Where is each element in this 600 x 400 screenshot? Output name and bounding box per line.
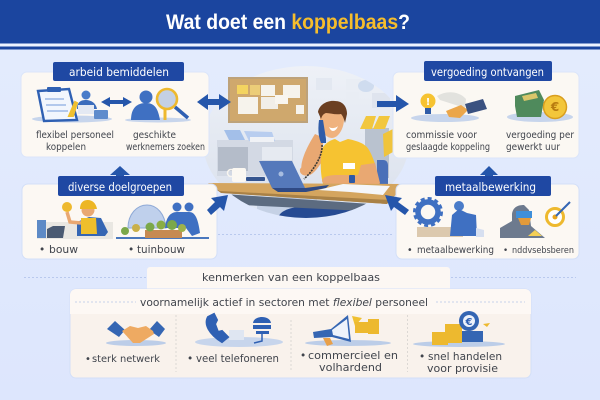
icon: magnifier person xyxy=(125,89,191,122)
corkboard with notes xyxy=(229,78,307,122)
subheading: voornamelijk actief in sectoren met flexibel personeel xyxy=(140,297,428,309)
text: sterk netwerk: sterk netwerk xyxy=(92,354,160,365)
desk xyxy=(208,183,406,212)
icon: telephone xyxy=(195,314,283,347)
header banner xyxy=(0,0,600,50)
text: metaalbewerking bullet: • xyxy=(407,245,413,256)
heading: arbeid bemiddelen xyxy=(69,65,169,79)
text: snel handelen voor provisie: snel handelen xyxy=(428,351,502,363)
text: vergoeding per gewerkt uur xyxy=(506,130,575,153)
text: veel telefoneren: veel telefoneren xyxy=(196,353,279,365)
person on phone xyxy=(300,101,380,186)
icon: lightbulb and handshake xyxy=(411,92,487,122)
icon: lightbulb and handshake: ! xyxy=(426,97,430,108)
text: veel telefoneren: • xyxy=(187,353,193,365)
panel: kenmerken van een koppelbaas xyxy=(70,289,531,378)
panel: arbeid bemiddelen xyxy=(21,62,209,157)
text: commercieel en volhardend: volhardend xyxy=(319,362,382,374)
text: bouw: • xyxy=(39,244,45,256)
arrow: up to vergoeding xyxy=(480,166,498,178)
text: metaalbewerking bullet: metaalbewerking xyxy=(417,245,494,256)
heading xyxy=(424,61,552,81)
text: snel handelen voor provisie xyxy=(419,351,502,375)
text: commercieel en volhardend xyxy=(300,350,398,374)
text: vergoeding per gewerkt uur: gewerkt uur xyxy=(506,142,561,153)
title: Wat doet een koppelbaas? xyxy=(166,11,410,34)
notebook xyxy=(318,184,390,195)
icon: coins and euro xyxy=(413,311,505,347)
coffee mug xyxy=(228,168,265,182)
arrow: between bemiddelen and illustration xyxy=(197,94,231,110)
icon: greenhouse and people xyxy=(116,202,209,239)
icon: money and euro coin: € xyxy=(550,100,559,114)
icon: coins and euro: € xyxy=(465,317,473,328)
laptop xyxy=(259,161,329,192)
icon: handshake xyxy=(106,321,166,346)
icon: clipboard xyxy=(32,87,112,122)
arrow: up to arbeid bemiddelen xyxy=(110,166,130,178)
panel: diverse doelgroepen xyxy=(22,176,217,259)
text: nddvsebsberen bullet: • xyxy=(503,246,508,256)
arrow: to illustration from lower left xyxy=(207,195,228,215)
text: geschikte werknemers zoeken xyxy=(126,130,205,153)
text: flexibel personeel koppelen: koppelen xyxy=(46,142,86,153)
text: bouw: bouw xyxy=(49,244,78,256)
text: commissie voor geslaagde koppeling: geslaagde koppeling xyxy=(406,142,490,153)
text: tuinbouw: tuinbouw xyxy=(137,244,185,256)
icon: welder xyxy=(500,202,570,238)
panel: metaalbewerking xyxy=(396,176,579,259)
text: commercieel en volhardend: commercieel en xyxy=(308,350,398,362)
text: geschikte werknemers zoeken: geschikte xyxy=(133,130,176,141)
text: snel handelen voor provisie: • xyxy=(419,351,425,363)
panel: kenmerken heading xyxy=(147,267,450,293)
icon: money and euro coin xyxy=(507,90,573,122)
text: tuinbouw: • xyxy=(128,244,134,256)
arrow: to illustration from lower right xyxy=(385,195,409,215)
central illustration: koppelbaas at desk xyxy=(203,66,415,220)
arrow: two-way xyxy=(101,97,132,107)
heading xyxy=(53,62,184,81)
arrow: illustration to vergoeding xyxy=(377,95,409,112)
text: sterk netwerk: • xyxy=(85,354,91,365)
text: vergoeding per gewerkt uur: vergoeding per xyxy=(506,130,575,141)
panel: vergoeding ontvangen xyxy=(393,61,579,158)
text: commercieel en volhardend: • xyxy=(300,350,306,362)
text: commissie voor geslaagde koppeling: commissie voor xyxy=(406,130,478,141)
text: flexibel personeel koppelen xyxy=(36,130,114,153)
heading: metaalbewerking xyxy=(445,180,536,194)
text: nddvsebsberen bullet: nddvsebsberen xyxy=(512,246,574,256)
icon: construction worker xyxy=(37,200,113,239)
heading xyxy=(435,176,551,196)
text: flexibel personeel koppelen: flexibel personeel xyxy=(36,130,114,141)
heading: vergoeding ontvangen xyxy=(431,65,544,79)
text: commissie voor geslaagde koppeling xyxy=(406,130,490,153)
icon: megaphone and coins xyxy=(305,315,391,346)
text: geschikte werknemers zoeken: werknemers zoeken xyxy=(126,142,205,153)
text: snel handelen voor provisie: voor provisie xyxy=(427,363,498,375)
heading: diverse doelgroepen xyxy=(68,180,172,194)
heading xyxy=(58,176,184,196)
panel: kenmerken heading: kenmerken van een koppelbaas xyxy=(202,271,380,284)
icon: gear and metalworker xyxy=(414,198,484,237)
